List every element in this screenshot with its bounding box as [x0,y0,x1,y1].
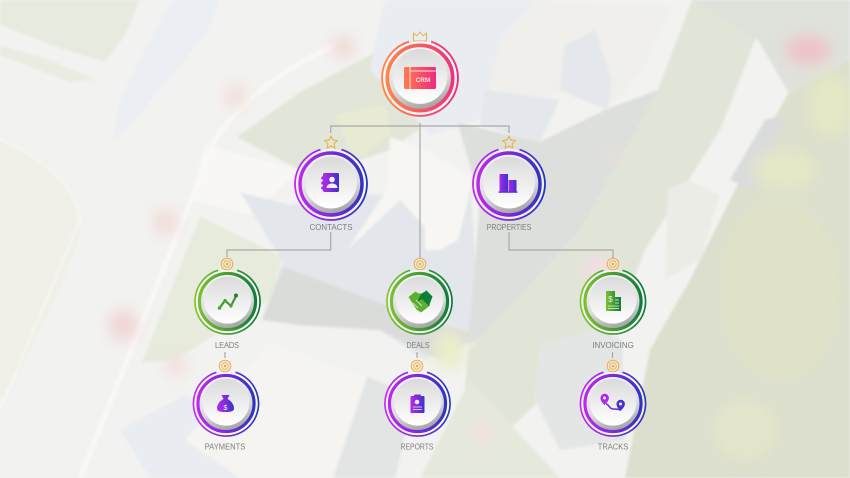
label: leads: LEADS [215,341,239,350]
node: Deals [387,258,452,350]
icon: CRM window: CRM [416,77,430,84]
label: reports: REPORTS [400,442,434,452]
icon: crown [414,32,426,41]
icon: star [325,136,337,148]
node: Invoicing [580,258,646,350]
icon: target medallion [411,360,423,372]
icon: target medallion [607,360,619,372]
icon: invoice: $ [608,295,613,304]
node: Reports [385,360,450,452]
icon: address book [321,173,339,192]
node: Properties [473,136,545,232]
icon: target medallion [607,258,619,270]
icon: clipboard [410,394,424,413]
connector lines [225,123,613,358]
label: invoicing: INVOICING [592,341,634,350]
node: Leads [195,258,260,350]
label: properties: PROPERTIES [487,223,532,232]
icon: money bag: $ [223,403,228,412]
node: Tracks [580,360,646,452]
label: deals: DEALS [406,341,430,350]
label: tracks: TRACKS [598,442,629,452]
icon: handshake [408,290,432,312]
node: Payments [193,360,259,452]
label: contacts: CONTACTS [310,223,353,232]
label: payments: PAYMENTS [205,442,246,452]
icon: target medallion [219,360,231,372]
icon: star [503,136,515,148]
node: CRM [382,32,458,116]
icon: route pins [600,394,625,411]
icon: trend line [218,294,238,310]
icon: target medallion [221,258,233,270]
icon: buildings [498,174,518,193]
node: Contacts [295,136,367,232]
icon: target medallion [414,258,426,270]
